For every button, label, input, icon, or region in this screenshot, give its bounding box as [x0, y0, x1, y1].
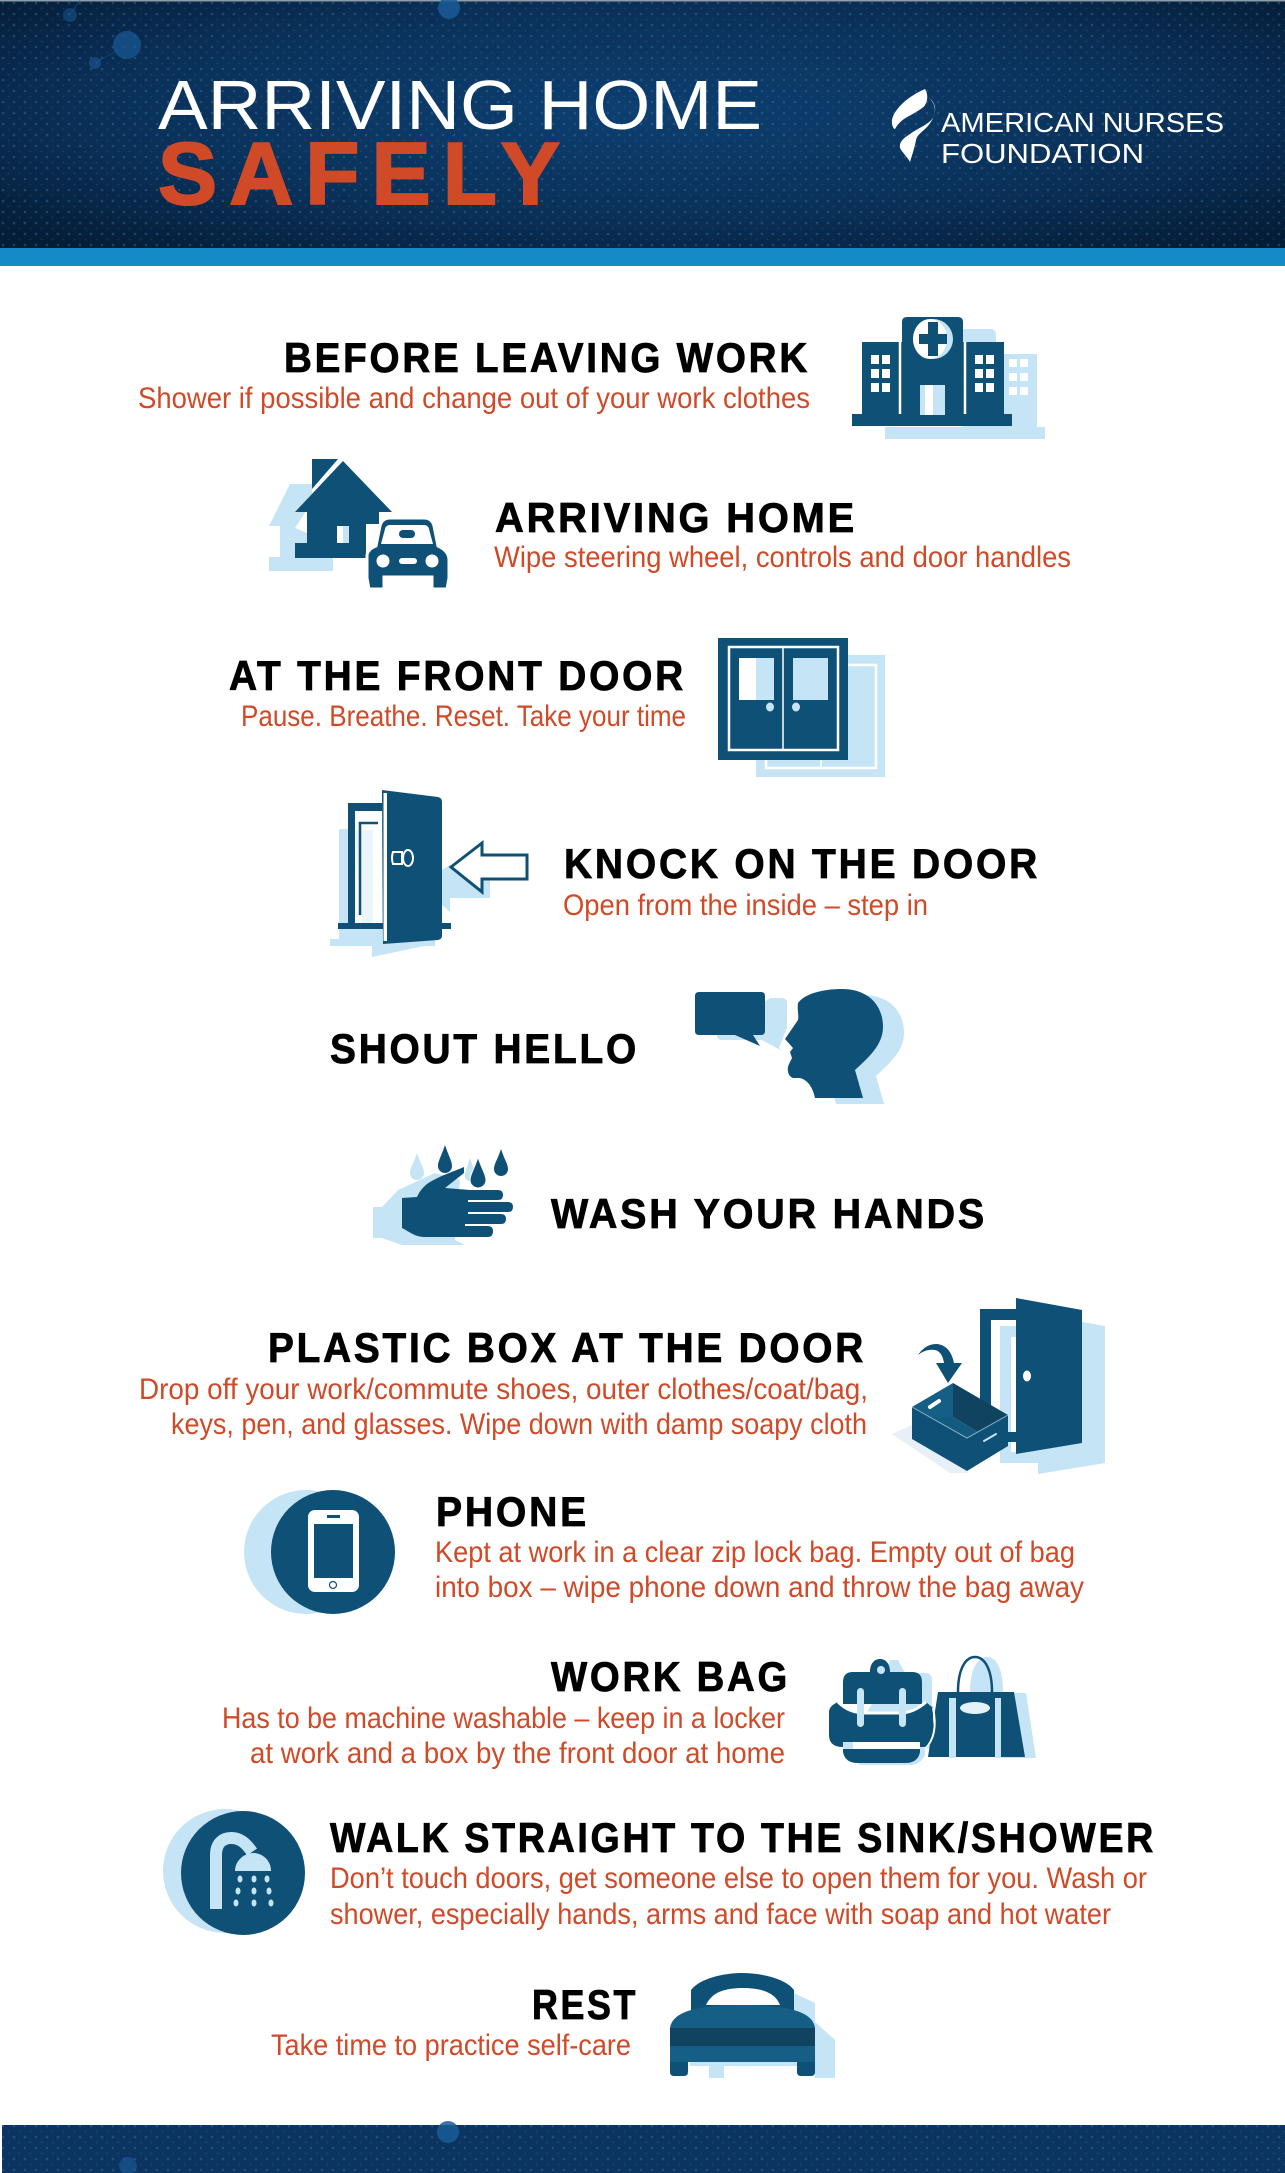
step: phone — [244, 1488, 1084, 1614]
step: work bag — [222, 1653, 1036, 1770]
icon: shower — [163, 1809, 305, 1935]
step: plastic box at the door — [139, 1298, 1105, 1474]
heading: PLASTIC BOX AT THE DOOR — [268, 1324, 866, 1371]
icon: house and car — [269, 459, 449, 589]
description: shower, especially hands, arms and face with soap and hot water — [330, 1898, 1111, 1931]
description: Shower if possible and change out of your work clothes — [138, 382, 810, 415]
step: walk straight to the sink/shower — [163, 1809, 1156, 1935]
description — [330, 1862, 1147, 1931]
step: knock on the door — [330, 790, 1040, 957]
step: before leaving work — [138, 317, 1045, 439]
heading: KNOCK ON THE DOOR — [564, 840, 1040, 887]
description: Has to be machine washable – keep in a locker — [222, 1702, 785, 1735]
description: Kept at work in a clear zip lock bag. Empty out of bag — [435, 1536, 1075, 1569]
heading: WASH YOUR HANDS — [551, 1190, 987, 1237]
title: ARRIVING HOME — [158, 66, 762, 144]
logo: American Nurses Foundation: FOUNDATION — [941, 138, 1144, 169]
logo: American Nurses Foundation: AMERICAN NURSES — [941, 107, 1224, 138]
step: shout hello — [330, 989, 904, 1104]
footer banner — [2, 2121, 1285, 2173]
description — [222, 1702, 785, 1770]
description: Take time to practice self-care — [271, 2029, 631, 2062]
step: rest — [271, 1973, 835, 2078]
icon: smartphone — [244, 1490, 395, 1614]
description: Drop off your work/commute shoes, outer clothes/coat/bag, — [139, 1373, 868, 1406]
heading: SHOUT HELLO — [330, 1025, 639, 1072]
description: keys, pen, and glasses. Wipe down with damp soapy cloth — [171, 1408, 867, 1441]
heading: ARRIVING HOME — [495, 494, 857, 541]
description: Pause. Breathe. Reset. Take your time — [241, 700, 686, 733]
description: Wipe steering wheel, controls and door handles — [494, 541, 1071, 574]
step: arriving home — [269, 459, 1071, 589]
icon: hand with water drops — [373, 1145, 513, 1245]
title: SAFELY — [158, 124, 572, 223]
icon: double doors — [718, 638, 885, 777]
heading: AT THE FRONT DOOR — [229, 652, 686, 699]
description: at work and a box by the front door at home — [250, 1737, 785, 1770]
heading: WALK STRAIGHT TO THE SINK/SHOWER — [330, 1814, 1156, 1861]
heading: REST — [532, 1981, 638, 2028]
header banner — [0, 0, 1285, 266]
description — [435, 1536, 1084, 1604]
icon: bed — [670, 1973, 835, 2078]
step: wash your hands — [373, 1145, 987, 1245]
title — [158, 66, 762, 223]
icon: door with arrow — [330, 790, 527, 957]
heading: WORK BAG — [551, 1653, 790, 1700]
description: Don’t touch doors, get someone else to open them for you. Wash or — [330, 1862, 1147, 1895]
icon: backpack and tote — [829, 1657, 1036, 1765]
logo: American Nurses Foundation — [892, 89, 1224, 169]
icon: hospital — [852, 317, 1045, 439]
icon: box and open door — [892, 1298, 1105, 1474]
step: at the front door — [229, 638, 885, 777]
heading: BEFORE LEAVING WORK — [284, 334, 810, 381]
description — [139, 1373, 868, 1441]
header accent bar — [0, 248, 1285, 266]
description: Open from the inside – step in — [563, 889, 928, 922]
description: into box – wipe phone down and throw the bag away — [435, 1571, 1084, 1604]
icon: head with speech bubble — [695, 989, 904, 1104]
heading: PHONE — [436, 1488, 589, 1535]
